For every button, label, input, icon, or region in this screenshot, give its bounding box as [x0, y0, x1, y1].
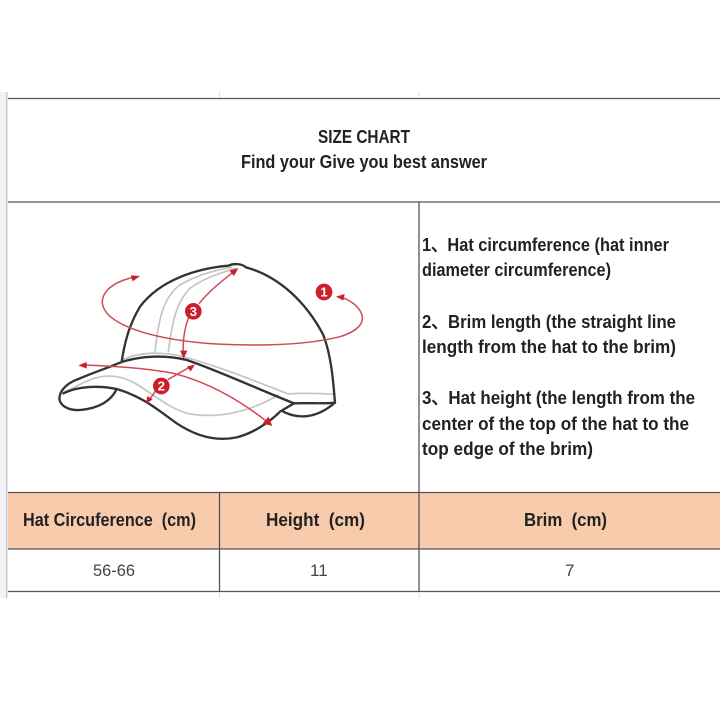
- measurement 1 arrow: 1: [320, 285, 328, 300]
- measurement notes: 1、Hat circumference (hat inner: [422, 235, 669, 255]
- measurement notes: [422, 235, 695, 459]
- table header labels: Hat Circuference (cm): [23, 510, 196, 530]
- table values: 56-66: [93, 561, 135, 580]
- hat diagram: [59, 264, 362, 439]
- measurement notes: diameter circumference): [422, 260, 611, 280]
- table header labels: Brim (cm): [524, 510, 607, 530]
- measurement 3 arrow: [180, 268, 238, 359]
- measurement notes: top edge of the brim): [422, 439, 593, 459]
- title: SIZE CHART: [318, 127, 410, 147]
- title: Find your Give you best answer: [241, 152, 487, 172]
- hat outline: [59, 264, 335, 439]
- measurement notes: length from the hat to the brim): [422, 337, 676, 357]
- table values: 7: [565, 561, 574, 580]
- measurement 3 arrow: 3: [190, 304, 197, 319]
- title: [241, 127, 487, 172]
- table values: 11: [310, 561, 328, 580]
- measurement 2 arrows: [78, 362, 272, 426]
- measurement notes: 3、Hat height (the length from the: [422, 388, 695, 408]
- measurement 2 arrows: 2: [158, 379, 165, 394]
- table values: [93, 561, 574, 580]
- measurement notes: 2、Brim length (the straight line: [422, 312, 676, 332]
- header fill row: [8, 493, 720, 549]
- table header labels: Height (cm): [266, 510, 365, 530]
- measurement notes: center of the top of the hat to the: [422, 414, 689, 434]
- table header labels: [23, 510, 607, 530]
- hat seams: [65, 267, 335, 415]
- measurement 1 arrow: [102, 275, 362, 345]
